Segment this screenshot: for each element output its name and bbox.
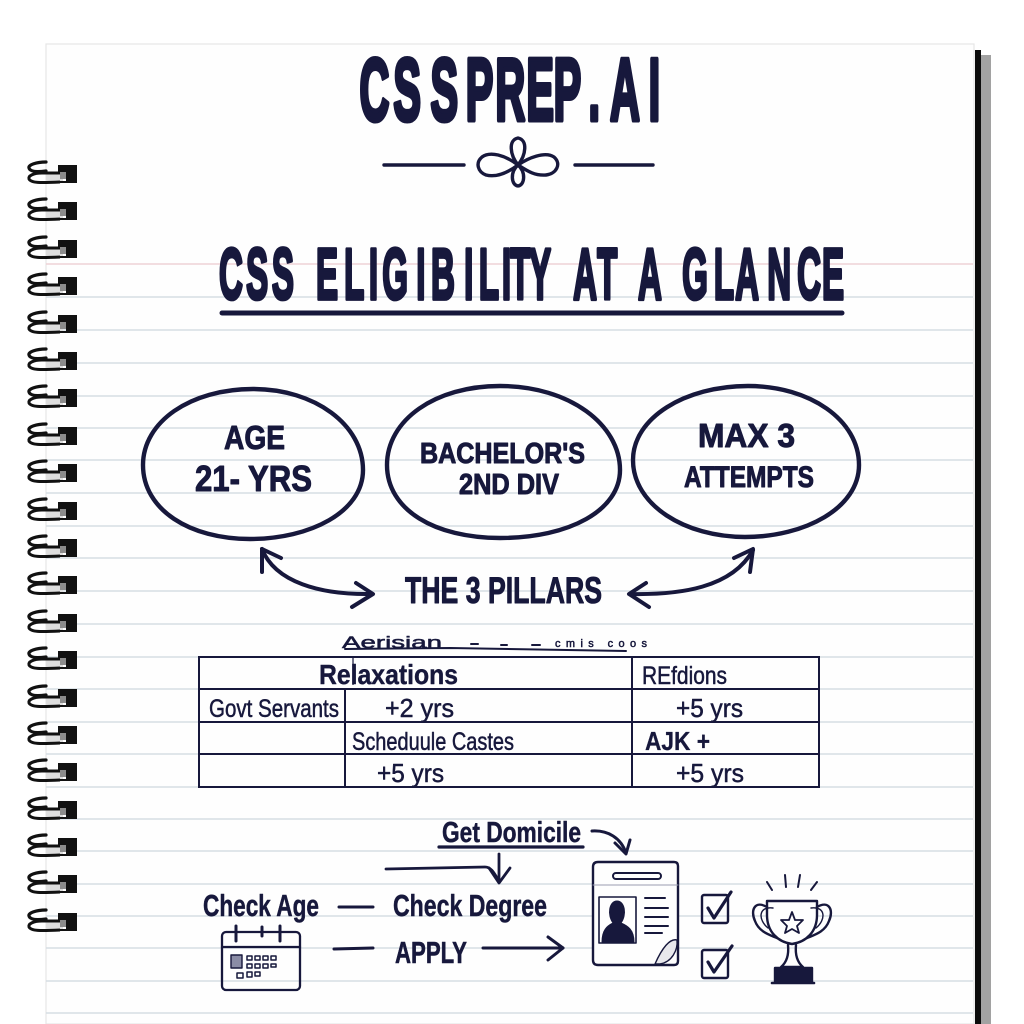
- relaxations table: Govt Servants: [209, 695, 339, 723]
- table caption scribble: [342, 633, 648, 652]
- pillar: bachelor's: BACHELOR'S: [420, 438, 585, 470]
- relaxations table: Relaxations: [319, 659, 458, 690]
- table caption scribble: Aerisian: [342, 633, 442, 652]
- pillar: age: 21- YRS: [195, 458, 312, 499]
- step: get domicile: Get Domicile: [442, 817, 581, 849]
- title: CSSPREP.AI: [360, 41, 660, 139]
- relaxations table: Scheduule Castes: [352, 728, 514, 756]
- pillar: age: [143, 389, 363, 539]
- arrow: apply to document: [483, 937, 563, 960]
- pillars label: THE 3 PILLARS: [405, 570, 602, 611]
- step: check degree: Check Degree: [393, 888, 547, 923]
- relaxations table: AJK +: [645, 726, 710, 756]
- title ornament: [384, 138, 653, 186]
- step: apply: APPLY: [395, 935, 467, 970]
- pillar: age: AGE: [224, 419, 285, 456]
- relaxations table: +5 yrs: [676, 693, 743, 723]
- icon: domicile document: [593, 862, 678, 965]
- pillar: max 3 attempts: [633, 386, 859, 537]
- icon: calendar: [222, 926, 300, 990]
- pillar: max 3 attempts: MAX 3: [698, 417, 795, 454]
- arrow: age to pillars: [262, 549, 373, 607]
- relaxations table: +5 yrs: [377, 758, 444, 788]
- step: check age: Check Age: [203, 888, 319, 923]
- dash: age to degree: [339, 906, 373, 908]
- icon: trophy: [753, 875, 831, 983]
- relaxations table: +5 yrs: [676, 758, 744, 788]
- icon: checkbox top: [702, 892, 731, 923]
- icon: checkbox bottom: [702, 946, 732, 978]
- table caption scribble: cmis coos: [555, 638, 648, 650]
- dash: calendar to apply: [334, 948, 373, 949]
- relaxations table: REfdions: [642, 662, 727, 690]
- heading: CSS ELIGIBILITY AT A GLANCE: [219, 233, 844, 314]
- pillar: bachelor's: 2ND DIV: [459, 469, 560, 501]
- pillar: max 3 attempts: ATTEMPTS: [684, 461, 814, 494]
- pillar: bachelor's: [387, 386, 620, 538]
- arrow: domicile to document: [592, 831, 630, 854]
- arrow: attempts to pillars: [629, 549, 753, 607]
- arrow: down to check degree: [386, 854, 510, 883]
- relaxations table: [199, 657, 819, 788]
- spiral binding: [29, 162, 77, 931]
- relaxations table: +2 yrs: [385, 693, 454, 723]
